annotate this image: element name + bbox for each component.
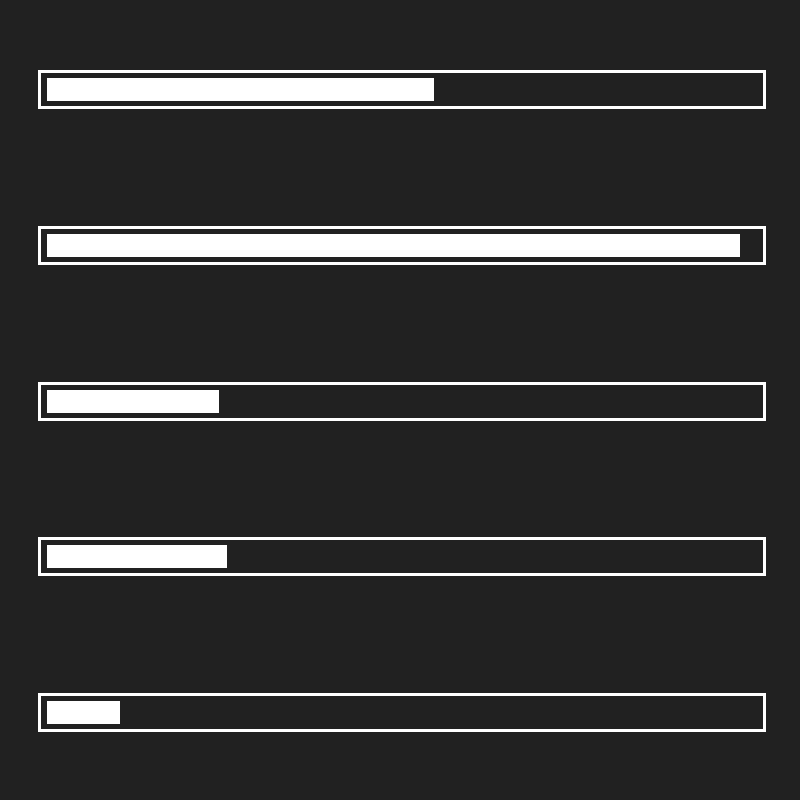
bar 4 bbox=[38, 537, 766, 576]
bar 3 bbox=[38, 382, 766, 421]
bar 2 bbox=[38, 226, 766, 265]
bar 5 bbox=[38, 693, 766, 732]
bar 1 bbox=[38, 70, 766, 109]
